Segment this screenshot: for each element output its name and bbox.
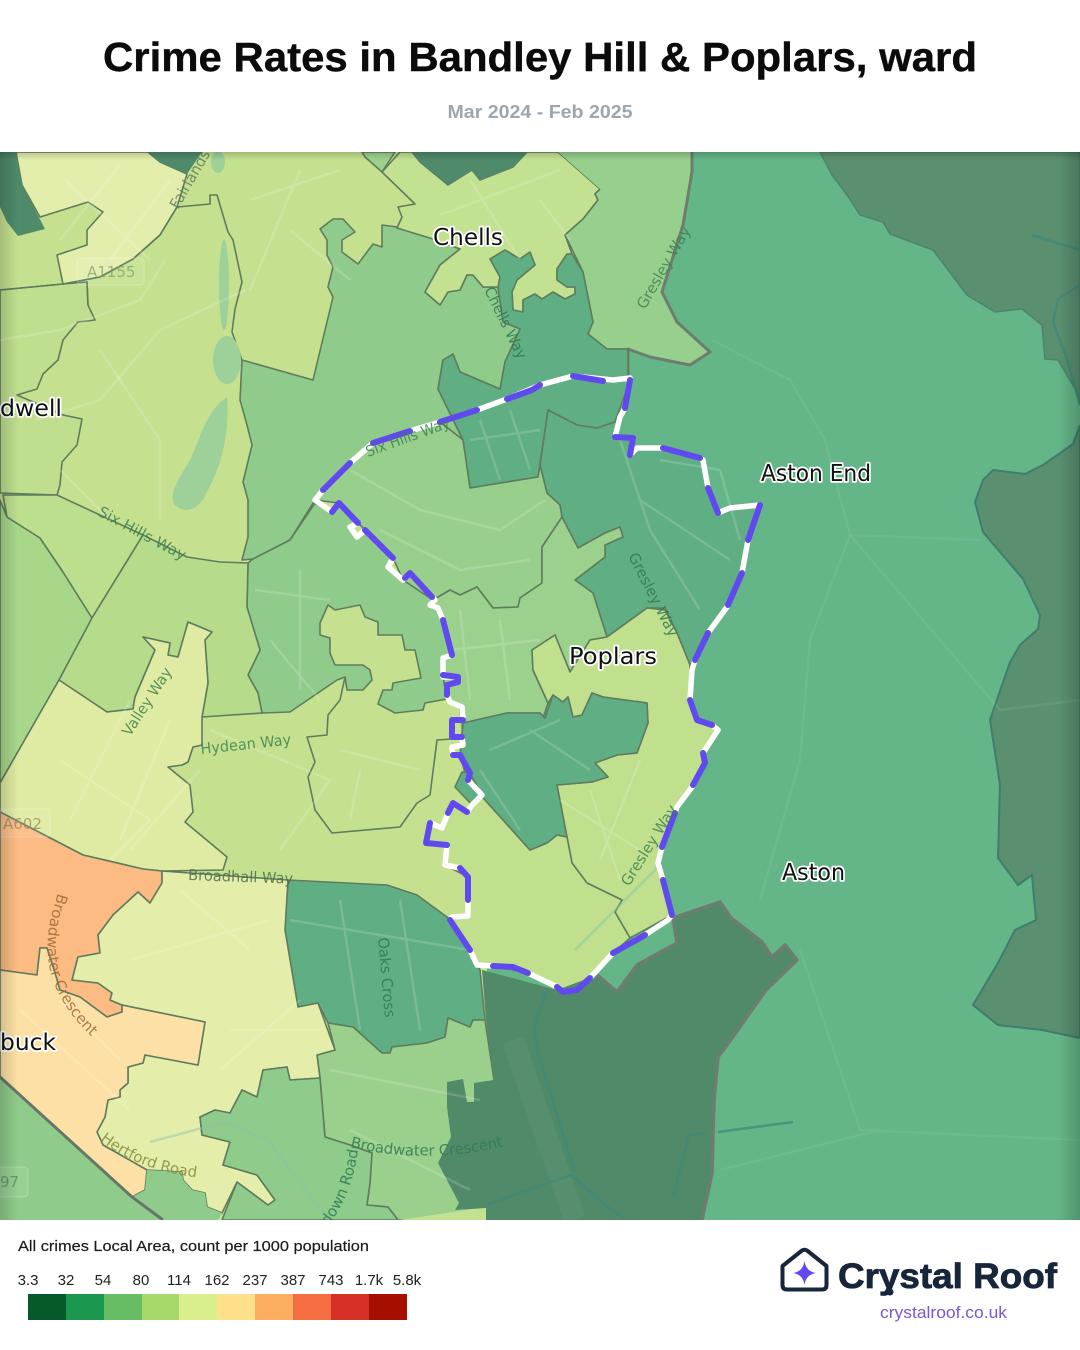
road labels: Gresley Way: [624, 550, 682, 640]
legend values: 3.3: [18, 1272, 38, 1289]
region: west base: [0, 152, 710, 1220]
creek: ward south: [150, 815, 676, 1220]
region: west mid green: [247, 503, 452, 713]
streams: [486, 235, 1080, 1220]
ward boundary: white line: [315, 376, 760, 992]
region: Poplars light: [532, 608, 718, 938]
region: north-east dark area: [820, 152, 1080, 405]
region: ward centre dark: [460, 693, 648, 850]
region: Valley Way lightest: [0, 622, 227, 871]
legend values: [18, 1272, 422, 1289]
road labels: Hydean Way: [200, 731, 292, 758]
place label: Aston End: Aston End: [761, 461, 871, 487]
region: ward east green: [540, 410, 760, 665]
legend values: 387: [280, 1272, 306, 1289]
map edge vignette: [0, 152, 1080, 1220]
border: south block grey edge: [597, 902, 797, 1220]
legend values: 54: [95, 1272, 111, 1289]
place label: dwell: dwell: [0, 396, 62, 422]
region: south-west green: [3, 495, 143, 618]
region: bottom-left green: [0, 1077, 222, 1220]
region: ward centre medium green: [315, 422, 562, 608]
region: top-left dark patch: [0, 152, 45, 236]
road labels: Chells Way: [480, 284, 531, 362]
region: bottom mid green: [200, 1067, 398, 1220]
road shield: A1155: [77, 258, 144, 285]
place label: Chells: Chells: [433, 225, 503, 251]
east streets: [712, 340, 1080, 1170]
logo: website url: crystalroof.co.uk: [880, 1304, 1008, 1322]
border: west green edge: [0, 195, 242, 360]
road labels: Gresley Way: [617, 801, 681, 889]
border: east of Chells edge: [565, 189, 628, 349]
legend values: 1.7k: [355, 1272, 384, 1289]
road labels: Hertford Road: [101, 1132, 197, 1178]
legend values: 5.8k: [393, 1272, 422, 1289]
subtitle: date range: Mar 2024 - Feb 2025: [448, 101, 632, 122]
logo: wordmark: Crystal Roof: [838, 1257, 1057, 1296]
legend values: 114: [167, 1272, 191, 1289]
legend values: 237: [242, 1272, 268, 1289]
region: top mid notch: [362, 152, 395, 172]
region: far north-west strip: [0, 282, 95, 495]
region: far-left green: [0, 500, 92, 783]
region: bottom right green: [317, 1018, 494, 1220]
region: Oaks Cross dark green: [285, 880, 485, 1053]
streets: [0, 165, 740, 1190]
region: Valley green: [59, 535, 262, 717]
region: ward centre south green: [433, 517, 623, 723]
region: top-left lightest: [16, 152, 187, 284]
legend values: 80: [133, 1272, 149, 1289]
region: south dark block: [438, 902, 797, 1220]
place label: Aston: Aston: [782, 860, 845, 886]
region: bottom notch light: [400, 1207, 486, 1220]
road shield: A602: A602: [3, 815, 42, 833]
border: thick south-west line: [0, 1077, 163, 1220]
region: Chells top light: [382, 152, 600, 312]
place label: Poplars: Poplars: [569, 644, 657, 670]
road labels: Fairlands: [166, 147, 214, 212]
rail corridor: [513, 1040, 575, 1220]
legend title: All crimes Local Area, count per 1000 population: [18, 1238, 369, 1255]
road shield: 97: [0, 1167, 28, 1197]
road labels: Broadwater Crescent: [352, 1136, 503, 1156]
region: Broadwater light: [72, 871, 335, 1213]
legend values: 162: [204, 1272, 230, 1289]
region: Broadwater orange: [0, 812, 162, 1017]
legend values: 32: [58, 1272, 74, 1289]
title: Crime Rates in Bandley Hill & Poplars, ward: [103, 34, 977, 80]
legend colour scale: [28, 1294, 407, 1320]
ward boundary: purple dashes: [323, 376, 760, 992]
road labels: Gresley Way: [633, 223, 695, 312]
road labels: Broadhall Way: [188, 866, 294, 888]
road labels: Six Hills Way: [95, 503, 189, 564]
road labels: Valley Way: [118, 664, 176, 739]
region: top dark patch: [148, 152, 202, 174]
road labels: down Road: [322, 1150, 358, 1220]
region: Chells dark green: [438, 250, 630, 488]
region: east dark band: [973, 425, 1080, 1038]
logo: house icon: [782, 1250, 826, 1290]
legend values: 743: [318, 1272, 344, 1289]
place label: buck: buck: [0, 1030, 57, 1056]
road labels: [47, 147, 695, 1220]
region: ward south light: [426, 795, 630, 992]
border: Gresley thick edge: [628, 152, 710, 378]
region: top dark notch: [412, 152, 527, 185]
road shield: 97: 97: [0, 1173, 19, 1191]
lakes: [173, 151, 241, 510]
road shield: A1155: A1155: [87, 263, 135, 281]
road labels: Oaks Cross: [374, 937, 399, 1018]
region: Chells mid green: [240, 219, 520, 560]
road shield: A602: [0, 809, 50, 837]
region: Shephall pale orange: [0, 948, 205, 1197]
region: small dark sliver: [455, 772, 482, 805]
road labels: Broadwater Crescent: [47, 894, 97, 1036]
road labels: Six Hills Way: [363, 414, 452, 461]
border: inner block line: [168, 677, 452, 833]
region: east of Chells light green: [558, 152, 710, 365]
